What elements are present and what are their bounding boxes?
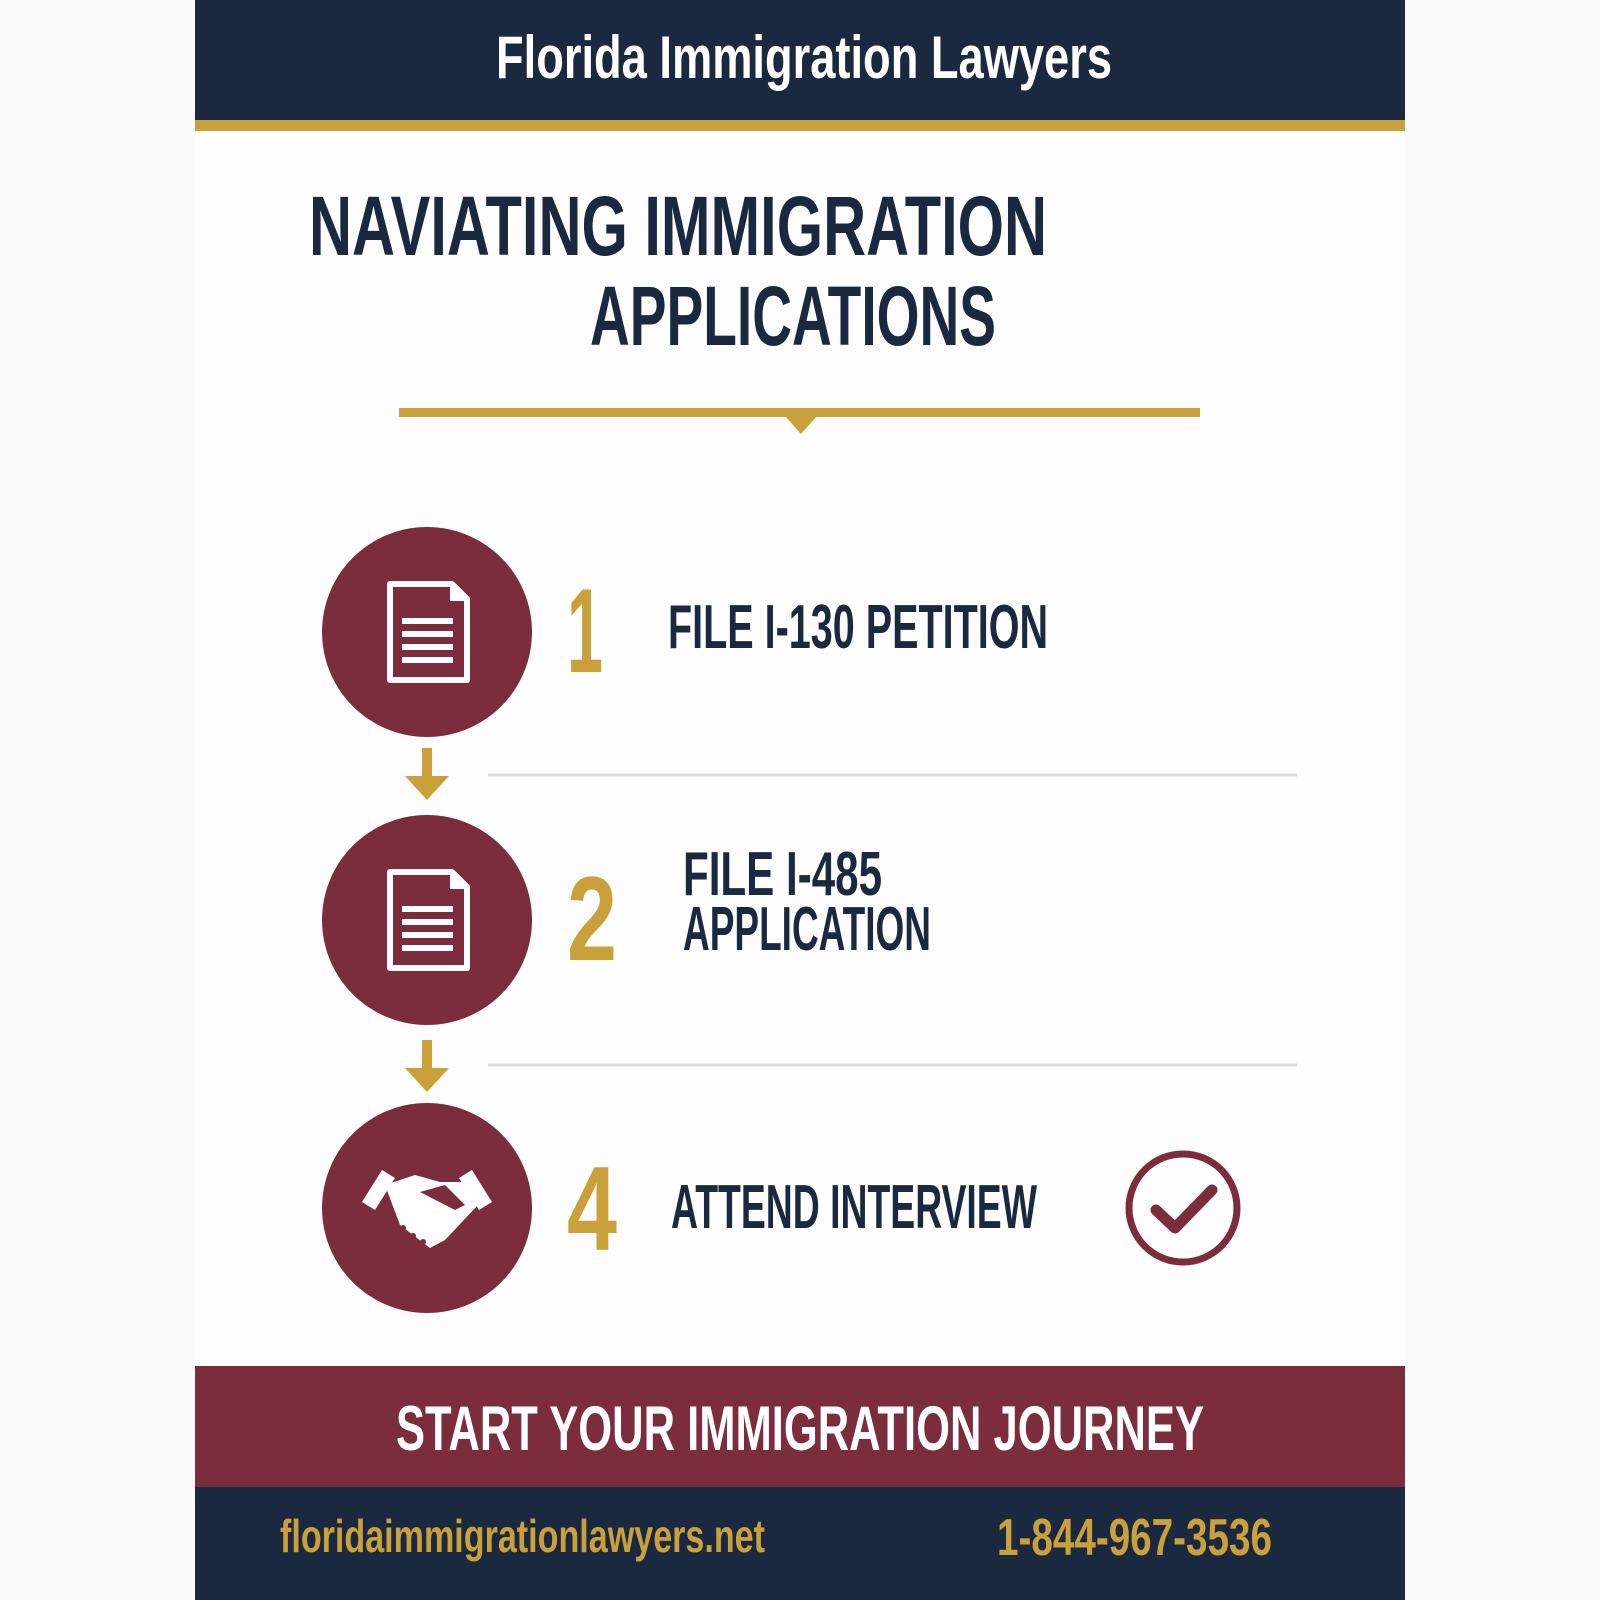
banner: call to action: START YOUR IMMIGRATION JOURNEY <box>396 1394 1204 1464</box>
step 2 <box>322 815 931 1025</box>
footer: contact: floridaimmigrationlawyers.net <box>280 1510 765 1562</box>
step 2: APPLICATION <box>683 895 931 964</box>
step 4: ATTEND INTERVIEW <box>671 1173 1037 1242</box>
banner: call to action <box>195 1366 1405 1488</box>
title: APPLICATIONS <box>590 269 996 363</box>
title divider <box>399 408 1200 434</box>
header bar: Florida Immigration Lawyers <box>496 24 1112 91</box>
arrow 1 <box>405 748 449 800</box>
title <box>309 179 1047 363</box>
icon: check circle <box>1129 1154 1237 1262</box>
icon: document circle 2 <box>322 815 532 1025</box>
step 4 <box>322 1103 1237 1313</box>
arrow 2 <box>405 1040 449 1092</box>
step 1: 1 <box>567 564 603 698</box>
step 1 <box>322 527 1048 737</box>
footer: contact <box>195 1487 1405 1600</box>
icon: handshake circle <box>322 1103 532 1313</box>
step 2: 2 <box>567 852 617 986</box>
header bar <box>195 0 1405 131</box>
title: NAVIATING IMMIGRATION <box>309 179 1047 273</box>
separator lines <box>488 775 1297 1065</box>
step 4: 4 <box>567 1142 617 1276</box>
icon: document circle 1 <box>322 527 532 737</box>
footer: contact: 1-844-967-3536 <box>997 1509 1272 1567</box>
step 2: FILE I-485 <box>683 840 882 909</box>
step 1: FILE I-130 PETITION <box>668 593 1048 662</box>
